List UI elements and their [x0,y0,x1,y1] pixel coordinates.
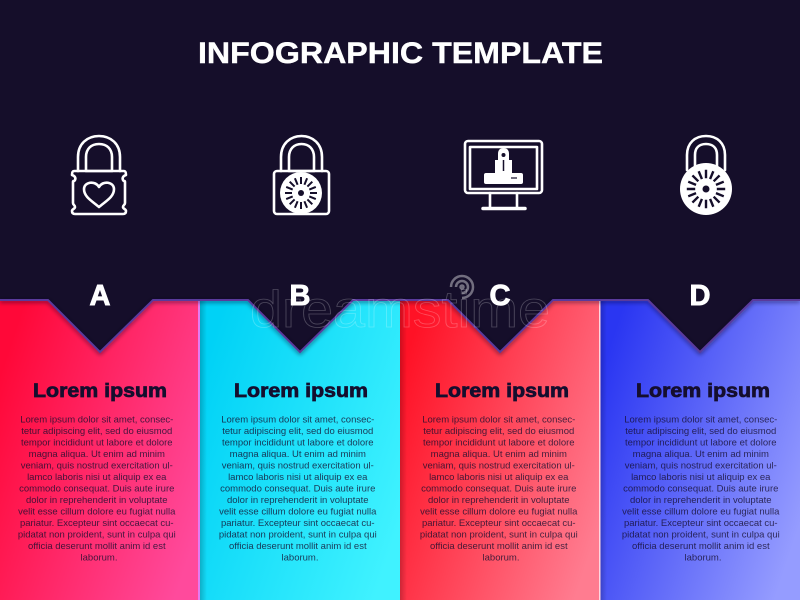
panel D background [600,300,800,600]
body text C: tetur adipiscing elit, sed do eiusmod [423,426,574,437]
body text C: lamco laboris nisi ut aliquip ex ea [429,472,569,483]
body text B: tetur adipiscing elit, sed do eiusmod [222,426,373,437]
body text D: veniam, quis nostrud exercitation ul- [625,460,777,471]
body text D: pariatur. Excepteur sint occaecat cu- [624,518,778,529]
body text C: officia deserunt mollit anim id est [430,541,568,552]
body text D: pidatat non proident, sunt in culpa qui [622,529,780,540]
body text C: laborum. [483,552,519,563]
title: INFOGRAPHIC TEMPLATE [198,37,603,70]
body text B: dolor in reprehenderit in voluptate [227,495,369,506]
body text A: pidatat non proident, sunt in culpa qui [18,529,176,540]
body text C: velit esse cillum dolore eu fugiat nulla [420,506,578,517]
body text B: laborum. [282,552,318,563]
body text A: velit esse cillum dolore eu fugiat nulla [18,506,176,517]
body text A: Lorem ipsum dolor sit amet, consec- [20,414,173,425]
icon: padlock with combination wheel [274,136,329,214]
watermark swirl [451,276,473,298]
icon: padlock with heart [72,136,126,214]
body text A: pariatur. Excepteur sint occaecat cu- [20,518,174,529]
body text B: officia deserunt mollit anim id est [229,541,367,552]
heading B: Lorem ipsum [234,381,368,402]
body text B: magna aliqua. Ut enim ad minim [230,449,366,460]
body text A: veniam, quis nostrud exercitation ul- [21,460,173,471]
body text A: magna aliqua. Ut enim ad minim [29,449,165,460]
body text D: dolor in reprehenderit in voluptate [630,495,772,506]
body text A: laborum. [81,552,117,563]
heading D: Lorem ipsum [636,381,770,402]
panel: B [200,280,400,600]
body text B: tempor incididunt ut labore et dolore [222,437,374,448]
body text D: tetur adipiscing elit, sed do eiusmod [625,426,776,437]
body text C: magna aliqua. Ut enim ad minim [431,449,567,460]
body text D: velit esse cillum dolore eu fugiat nulla [622,506,780,517]
body text C: commodo consequat. Duis aute irure [421,483,576,494]
body text C: veniam, quis nostrud exercitation ul- [423,460,575,471]
panel: A [0,280,200,600]
panel: D [600,280,800,600]
body text A: commodo consequat. Duis aute irure [19,483,174,494]
letter A: A [90,280,111,312]
body text D: Lorem ipsum dolor sit amet, consec- [624,414,777,425]
body text D: laborum. [685,552,721,563]
panel: C [400,280,600,600]
body text A: tetur adipiscing elit, sed do eiusmod [21,426,172,437]
body text B: pidatat non proident, sunt in culpa qui [219,529,377,540]
body text C: Lorem ipsum dolor sit amet, consec- [422,414,575,425]
body text D: commodo consequat. Duis aute irure [623,483,778,494]
body text C: pariatur. Excepteur sint occaecat cu- [422,518,576,529]
letter D: D [690,280,710,312]
body text C: tempor incididunt ut labore et dolore [423,437,575,448]
body text B: velit esse cillum dolore eu fugiat nulla [219,506,377,517]
body text A: dolor in reprehenderit in voluptate [26,495,168,506]
body text B: veniam, quis nostrud exercitation ul- [222,460,374,471]
watermark text: dreamstime [250,281,550,339]
body text C: pidatat non proident, sunt in culpa qui [420,529,578,540]
letter C: C [490,280,511,312]
heading A: Lorem ipsum [33,381,167,402]
letter B: B [290,280,310,312]
body text B: lamco laboris nisi ut aliquip ex ea [228,472,368,483]
notch outline [0,300,800,352]
body text D: lamco laboris nisi ut aliquip ex ea [631,472,771,483]
body text D: tempor incididunt ut labore et dolore [625,437,777,448]
icon: computer monitor with padlock [465,141,542,208]
body text A: tempor incididunt ut labore et dolore [21,437,173,448]
body text A: lamco laboris nisi ut aliquip ex ea [27,472,167,483]
heading C: Lorem ipsum [435,381,569,402]
body text A: officia deserunt mollit anim id est [28,541,166,552]
icon: round combination padlock [680,136,732,215]
panel B background [200,300,400,600]
body text D: magna aliqua. Ut enim ad minim [633,449,769,460]
body text D: officia deserunt mollit anim id est [632,541,770,552]
body text B: Lorem ipsum dolor sit amet, consec- [221,414,374,425]
body text C: dolor in reprehenderit in voluptate [428,495,570,506]
body text B: pariatur. Excepteur sint occaecat cu- [221,518,375,529]
watermark [250,276,550,339]
body text B: commodo consequat. Duis aute irure [220,483,375,494]
panel C background [400,300,600,600]
panel A background [0,300,200,600]
